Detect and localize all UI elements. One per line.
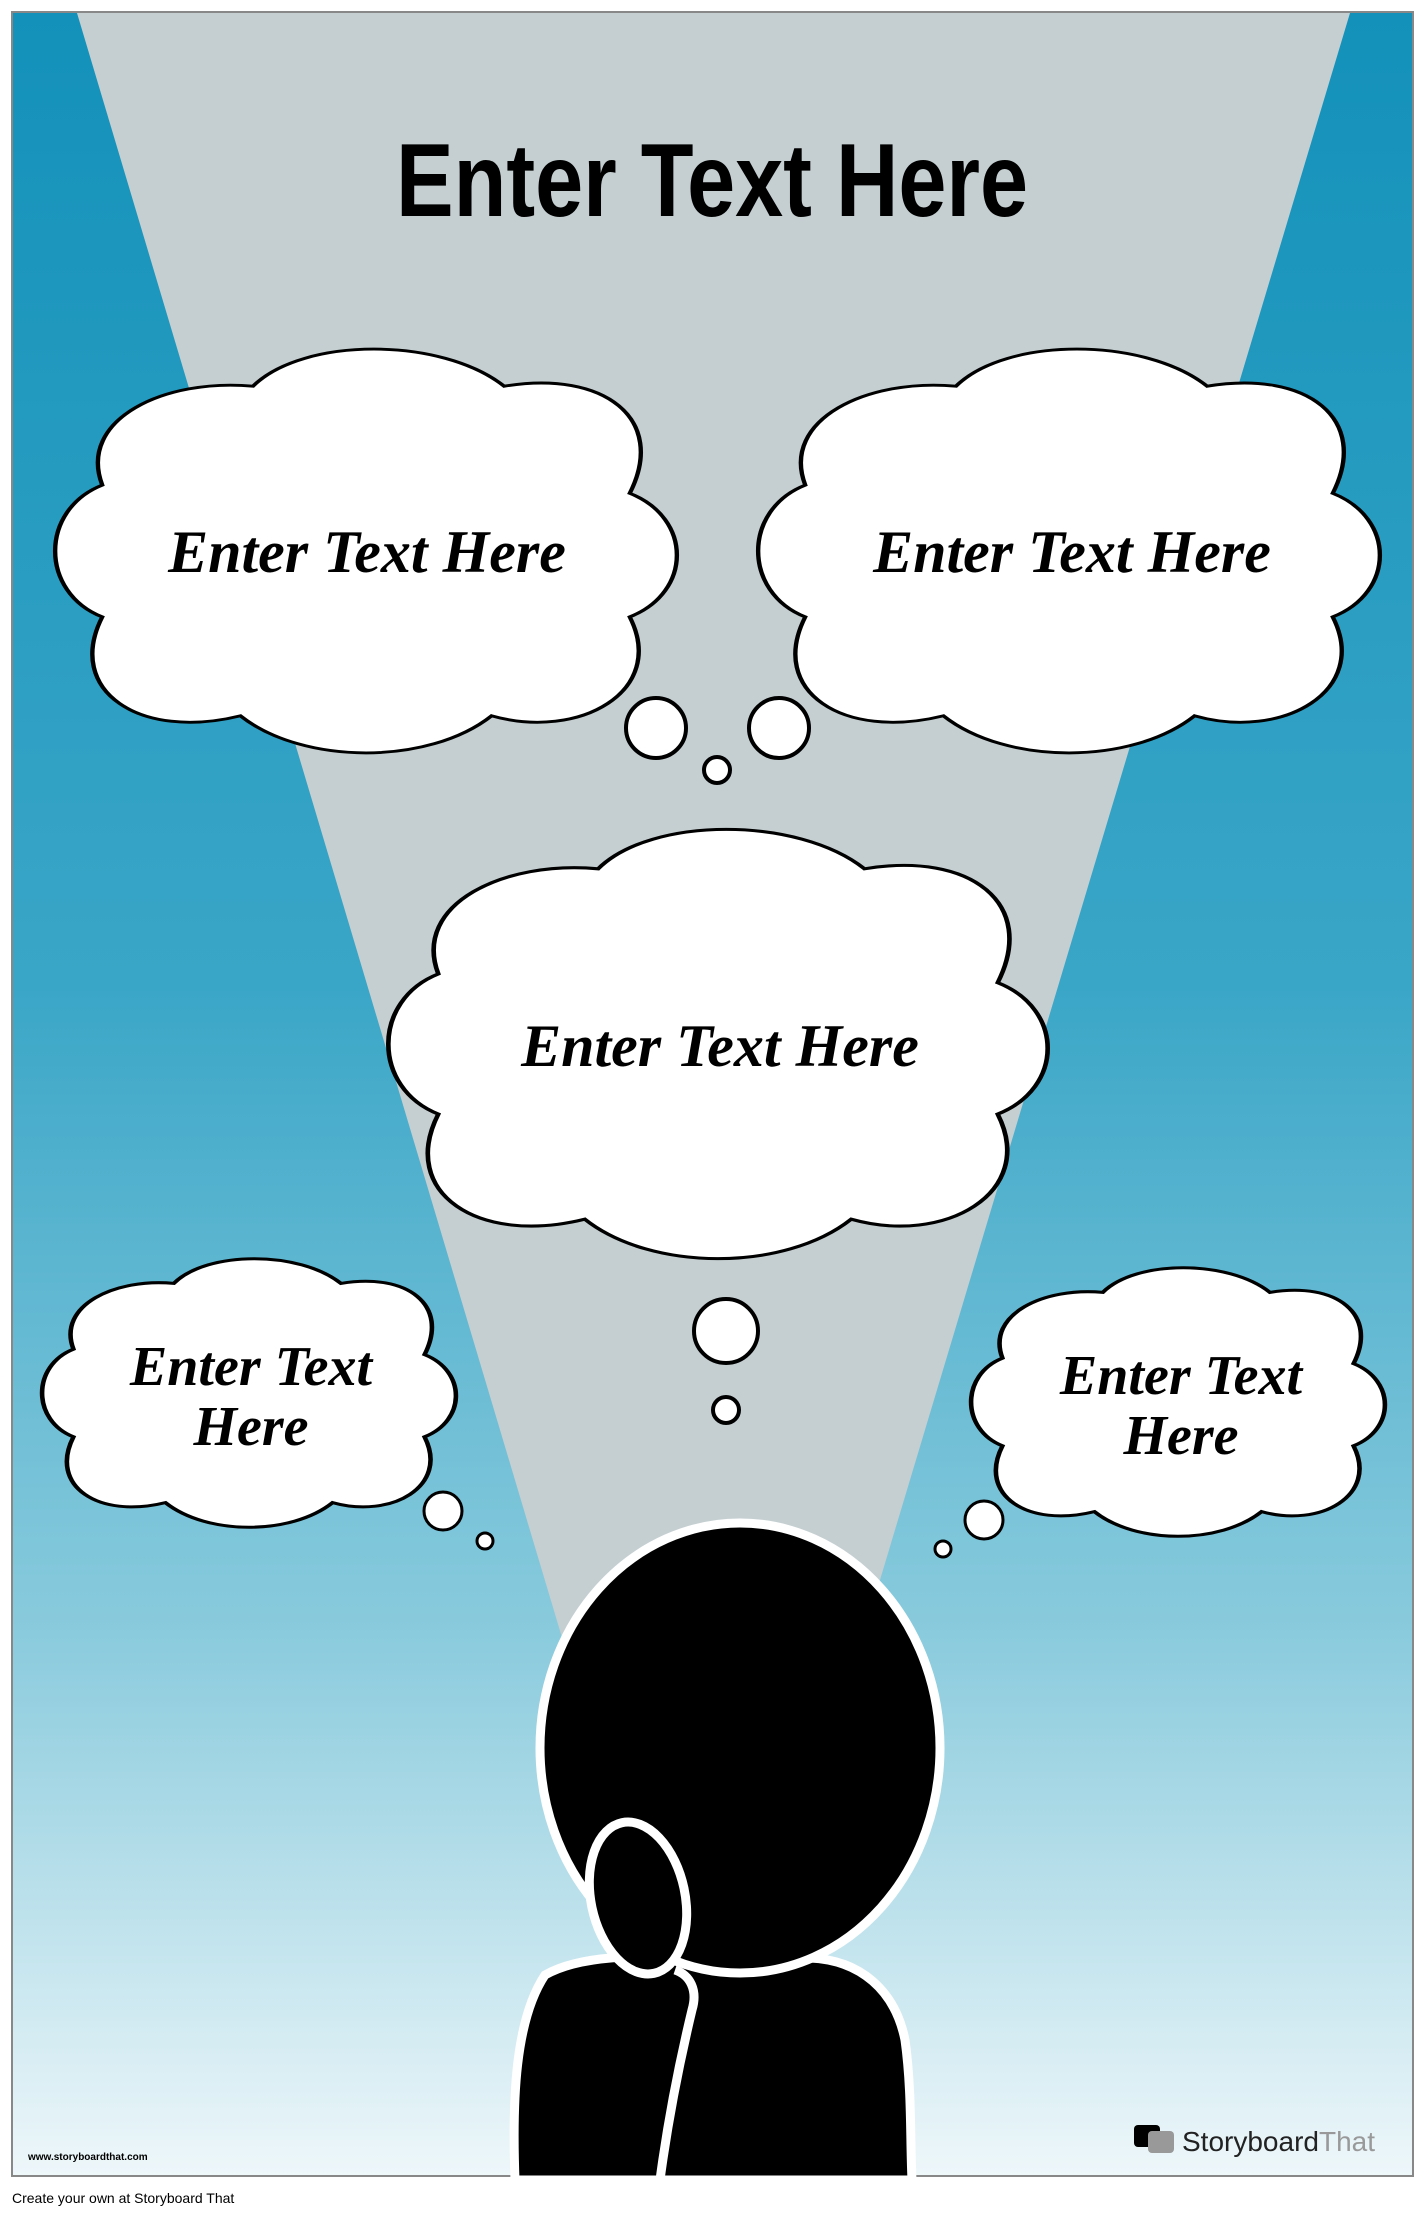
cloud: center [388, 829, 1048, 1259]
logo: StoryboardThat [1182, 2126, 1375, 2157]
cloud: center: Enter Text Here [520, 1013, 919, 1079]
cloud: top left [55, 349, 677, 753]
thought bubbles: top [626, 698, 809, 783]
cloud: top right [758, 349, 1380, 753]
cloud: bottom right: Enter Text [1059, 1345, 1304, 1407]
thought bubbles: sides [424, 1492, 1003, 1557]
cloud: top left: Enter Text Here [167, 519, 566, 585]
cloud: bottom left: Here [192, 1396, 309, 1458]
cloud: bottom right: Here [1122, 1405, 1239, 1467]
cloud: top right: Enter Text Here [872, 519, 1271, 585]
thought bubbles: center [694, 1299, 758, 1423]
footer url: www.storyboardthat.com [27, 2152, 148, 2163]
footer caption: Create your own at Storyboard That [12, 2190, 234, 2206]
title: Enter Text Here [396, 123, 1028, 239]
cloud: bottom left [42, 1259, 456, 1527]
cloud: bottom left: Enter Text [129, 1336, 374, 1398]
person silhouette [514, 1523, 940, 2180]
cloud: bottom right [971, 1268, 1385, 1536]
